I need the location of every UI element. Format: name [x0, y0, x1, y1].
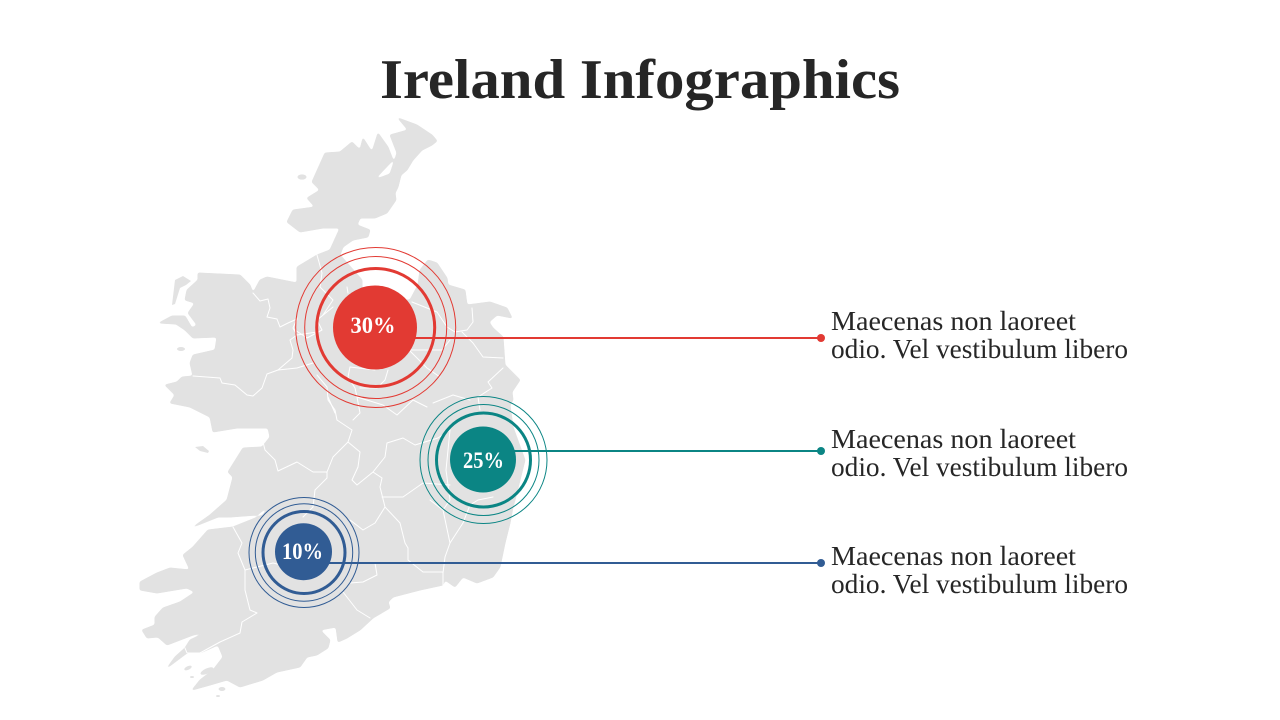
marker: 10%: 10% — [282, 539, 323, 564]
text block: blue item: Maecenas non laoreet — [831, 541, 1077, 571]
text block: teal item: Maecenas non laoreet — [831, 424, 1077, 454]
text block: teal item — [831, 424, 1128, 482]
connector line: teal — [510, 447, 825, 455]
connector line: red — [410, 334, 825, 342]
text block: teal item: odio. Vel vestibulum libero — [831, 452, 1128, 482]
map of Ireland — [140, 118, 525, 697]
county borders — [185, 255, 503, 653]
islands — [172, 174, 306, 697]
text block: red item: odio. Vel vestibulum libero — [831, 334, 1128, 364]
marker: 25% — [420, 396, 547, 524]
text block: red item — [831, 306, 1128, 364]
text block: blue item — [831, 541, 1128, 599]
marker: 10% — [249, 498, 359, 608]
text block: blue item: odio. Vel vestibulum libero — [831, 569, 1128, 599]
marker: 30% — [296, 248, 456, 408]
connector line: blue — [325, 559, 825, 567]
marker: 30%: 30% — [350, 313, 396, 338]
marker: 25%: 25% — [463, 448, 504, 473]
text block: red item: Maecenas non laoreet — [831, 306, 1077, 336]
title: Ireland Infographics — [380, 49, 900, 111]
